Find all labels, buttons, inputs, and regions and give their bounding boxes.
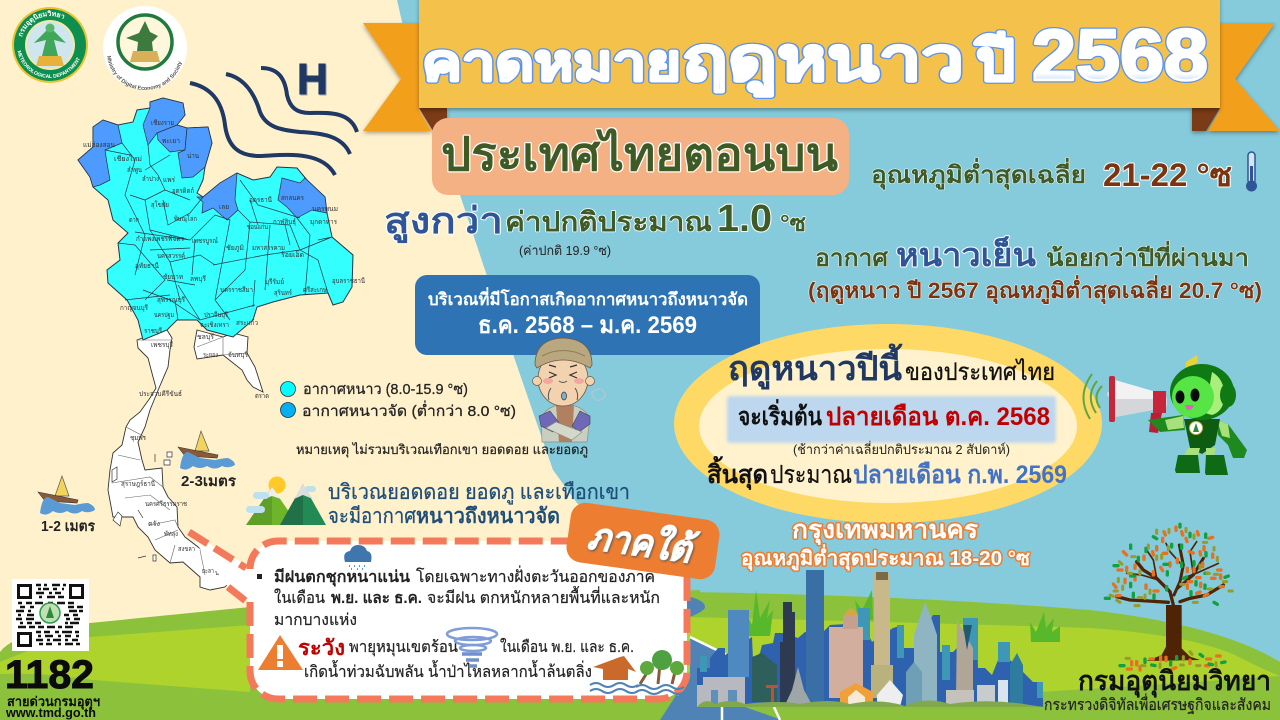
icon: boat and sea 2-3 m xyxy=(178,431,236,490)
text: higher than normal xyxy=(384,198,806,244)
icon: tornado xyxy=(447,628,497,666)
city skyline xyxy=(697,570,1044,707)
map of Thailand xyxy=(78,98,365,590)
buildings xyxy=(728,610,749,677)
map: province labels: แพร่ xyxy=(163,177,175,184)
map: province labels: นครพนม xyxy=(312,206,338,213)
map: south province borders xyxy=(112,337,247,575)
logo: Ministry of Digital Economy and Society: Ministry of Digital Economy and Society xyxy=(107,56,182,90)
map: province labels: มหาสารคาม xyxy=(252,245,285,252)
icon: sound waves xyxy=(1083,374,1102,419)
legend xyxy=(280,381,516,420)
text: mountain areas: จะมีอากาศ xyxy=(328,505,417,528)
map: province labels: สุรินทร์ xyxy=(274,289,292,297)
logo: Meteorological Department: METEOROLOGICAL DEPARTMENT xyxy=(18,50,80,78)
panel: southern region xyxy=(188,532,687,699)
tab: southern region heading: ภาคใต้ xyxy=(585,514,701,573)
map: province labels: อุทัยธานี xyxy=(135,262,159,270)
text: cooler than last year: หนาวเย็น xyxy=(896,235,1036,273)
map: province labels: กาฬสินธุ์ xyxy=(273,218,296,226)
southern text: มีฝนตกชุกหนาแน่น xyxy=(274,567,410,587)
map: province labels: ตรัง xyxy=(148,520,160,528)
map: province labels: ตราด xyxy=(255,393,269,400)
logo: Meteorological Department xyxy=(12,7,88,83)
end date: สิ้นสุด xyxy=(707,455,768,491)
text: mountain areas: หนาวถึงหนาวจัด xyxy=(416,505,560,528)
text: Bangkok xyxy=(741,516,1030,572)
map: province labels: ขอนแก่น xyxy=(247,224,268,231)
map: province labels: สงขลา xyxy=(178,546,195,553)
warning text: ระวัง xyxy=(298,637,345,660)
start date band: ปลายเดือน ต.ค. 2568 xyxy=(826,403,1050,431)
average minimum temperature xyxy=(871,157,1232,193)
icon: boat and sea 1-2 m: 1-2 เมตร xyxy=(41,519,95,535)
hotline xyxy=(5,653,100,720)
end date: ประมาณ xyxy=(770,461,852,489)
map: province labels: พัทลุง xyxy=(164,530,178,538)
map: province labels: สุพรรณบุรี xyxy=(157,296,185,304)
map: province labels: ลำพูน xyxy=(127,166,142,174)
average minimum temperature: 21-22 °ซ xyxy=(1103,157,1232,193)
map: province labels: นครปฐม xyxy=(154,312,174,319)
map: province labels: อุบลราชธานี xyxy=(332,277,365,285)
map: province labels: เพชรบูรณ์ xyxy=(192,237,218,245)
text: normal value: (ค่าปกติ 19.9 °ซ) xyxy=(519,243,611,258)
text: last year comparison: (ฤดูหนาว ปี 2567 อุณหภูมิต่ำสุดเฉลี่ย 20.7 °ซ) xyxy=(808,274,1262,305)
title: คาดหมาย xyxy=(422,35,681,91)
text: higher than normal: สูงกว่า xyxy=(384,200,503,244)
map note: หมายเหตุ ไม่รวมบริเวณเทือกเขา ยอดดอย และยอดภู xyxy=(296,442,588,458)
panel: cold period xyxy=(415,275,760,355)
map: province labels: เชียงราย xyxy=(151,119,174,127)
title: ฤดูหนาว xyxy=(682,26,964,97)
title: ปี xyxy=(974,29,1015,92)
map: province labels: สุราษฎร์ธานี xyxy=(121,480,155,488)
icon: shivering man xyxy=(532,338,605,442)
map: province labels: ปราจีนบุรี xyxy=(204,311,228,319)
hotline: 1182 xyxy=(5,653,94,697)
icon: green robot mascot xyxy=(1148,355,1247,475)
text: higher than normal: °ซ xyxy=(780,210,806,236)
text: Bangkok: อุณหภูมิต่ำสุดประมาณ 18-20 °ซ xyxy=(741,543,1030,572)
this winter heading: ฤดูหนาวปีนี้ xyxy=(728,343,903,390)
warning text: เกิดน้ำท่วมฉับพลัน น้ำป่าไหลหลากน้ำล้นตลิ่ง xyxy=(304,660,592,681)
banner xyxy=(419,0,1220,108)
legend: อากาศหนาว (8.0-15.9 °ซ) xyxy=(303,381,468,398)
southern text: ในเดือน xyxy=(274,588,325,607)
map: province labels: สระแก้ว xyxy=(236,319,258,327)
icon: boat and sea 1-2 m xyxy=(38,476,95,535)
map: province labels: ระยอง xyxy=(203,352,218,359)
map: province labels: ประจวบคีรีขันธ์ xyxy=(139,390,182,398)
map: province labels: ฉะเชิงเทรา xyxy=(200,321,229,329)
later than normal note: (ช้ากว่าค่าเฉลี่ยปกติประมาณ 2 สัปดาห์) xyxy=(793,441,1010,457)
icon: flooded trees xyxy=(636,650,684,694)
end date: ปลายเดือน ก.พ. 2569 xyxy=(853,461,1067,489)
map: province labels: ศรีสะเกษ xyxy=(303,286,327,294)
map: province labels: อุตรดิตถ์ xyxy=(172,187,194,195)
icon: warning triangle xyxy=(258,635,303,670)
warning text: ในเดือน พ.ย. และ ธ.ค. xyxy=(500,638,634,656)
southern text xyxy=(257,565,660,629)
map: province labels xyxy=(83,119,365,577)
map: southern peninsula xyxy=(108,330,238,590)
map: province labels: ราชบุรี xyxy=(144,327,162,335)
map: province labels: นครศรีธรรมราช xyxy=(145,500,187,508)
map: province labels: แม่ฮ่องสอน xyxy=(83,142,115,149)
warning text xyxy=(298,637,634,681)
legend: อากาศหนาวจัด (ต่ำกว่า 8.0 °ซ) xyxy=(302,400,516,420)
logo: Meteorological Department: กรมอุตุนิยมวิทยา xyxy=(18,10,64,37)
text: mountain areas xyxy=(328,481,630,528)
icon: autumn tree xyxy=(1105,524,1232,670)
text: cooler than last year xyxy=(815,235,1249,273)
hotline: สายด่วนกรมอุตุฯ xyxy=(7,694,100,710)
text: higher than normal: 1.0 xyxy=(717,198,772,240)
map: eastern provinces xyxy=(194,330,263,392)
skyline trees xyxy=(697,700,1044,707)
southern text: โดยเฉพาะทางฝั่งตะวันออกของภาค xyxy=(416,565,655,586)
panel: upper Thailand heading: ประเทศไทยตอนบน xyxy=(441,128,839,180)
southern text: พ.ย. และ ธ.ค. xyxy=(331,590,422,607)
map: very cold provinces xyxy=(78,98,327,220)
map: province labels: ร้อยเอ็ด xyxy=(281,250,304,259)
map: province labels: ชัยนาท xyxy=(163,273,183,281)
skyline backdrop xyxy=(697,615,1043,707)
background: left hill xyxy=(0,590,700,720)
average minimum temperature: อุณหภูมิต่ำสุดเฉลี่ย xyxy=(871,157,1086,191)
map: province labels: นครราชสีมา xyxy=(220,286,253,294)
map: province labels: อุดรธานี xyxy=(249,196,272,204)
text: Meteorological Department: กรมอุตุนิยมวิทยา xyxy=(1078,666,1271,698)
icon: grass tufts xyxy=(745,590,1060,642)
map: province labels: ลพบุรี xyxy=(190,275,206,283)
text: cooler than last year: น้อยกว่าปีที่ผ่านมา xyxy=(1046,240,1249,272)
this winter heading xyxy=(728,343,1055,390)
panel: this winter xyxy=(674,324,1102,523)
map: province labels: เลย xyxy=(219,204,229,211)
map: province labels: พิจิตร xyxy=(168,235,184,243)
map: province labels: พะเยา xyxy=(162,138,180,145)
text: higher than normal: ค่าปกติประมาณ xyxy=(505,207,712,237)
banner ribbons xyxy=(363,23,1280,131)
map: province labels: นราธิวาส xyxy=(215,569,240,577)
title: 2568 xyxy=(1032,16,1208,96)
hotline: www.tmd.go.th xyxy=(5,705,96,720)
panel: cold period: ธ.ค. 2568 – ม.ค. 2569 xyxy=(478,312,697,339)
start date band: จะเริ่มต้น xyxy=(738,399,822,431)
map: province labels: จันทบุรี xyxy=(228,351,248,359)
map: province labels: ปัตตานี xyxy=(206,550,224,558)
map: province labels: น่าน xyxy=(187,153,199,160)
map: province labels: ชลบุรี xyxy=(197,333,214,341)
title: 2568 xyxy=(1032,16,1208,96)
text: Bangkok: กรุงเทพมหานคร xyxy=(792,516,979,546)
map: islands xyxy=(112,452,172,561)
panel: upper Thailand heading xyxy=(432,118,849,195)
road xyxy=(660,596,782,720)
logo: Ministry of Digital Economy and Society xyxy=(103,6,187,90)
text: cooler than last year: อากาศ xyxy=(815,245,889,272)
end date xyxy=(707,455,1067,491)
this winter heading: ของประเทศไทย xyxy=(905,358,1055,386)
map: province labels: กำแพงเพชร xyxy=(136,235,168,243)
map: province labels: ลำปาง xyxy=(142,175,159,183)
icon: rain cloud xyxy=(344,545,372,569)
map: province labels: เพชรบุรี xyxy=(151,341,173,349)
icon: wind lines xyxy=(190,68,357,175)
map: province labels: กาญจนบุรี xyxy=(120,304,148,312)
background: right hill xyxy=(686,592,1280,720)
warning text: พายุหมุนเขตร้อน xyxy=(349,639,458,657)
icon: flooded house xyxy=(590,656,638,693)
title xyxy=(422,16,1208,97)
map: province labels: สกลนคร xyxy=(281,195,304,202)
southern text: จะมีฝน ตกหนักหลายพื้นที่และหนัก xyxy=(427,586,660,607)
title: ฤดูหนาว xyxy=(682,26,964,97)
icon: megaphone xyxy=(1107,376,1167,433)
tab: southern region heading xyxy=(565,501,721,581)
text: mountain areas: บริเวณยอดดอย ยอดภู และเทือกเขา xyxy=(328,481,630,505)
map: province labels: ชัยภูมิ xyxy=(226,244,244,252)
high pressure H: H xyxy=(297,55,328,104)
map: province labels: เชียงใหม่ xyxy=(114,154,142,163)
map: province labels: ยะลา xyxy=(202,568,214,575)
map: province borders xyxy=(105,143,332,320)
map: cold area outline xyxy=(78,98,353,340)
map: province labels: ตาก xyxy=(129,217,139,224)
map: province labels: พิษณุโลก xyxy=(174,214,197,223)
map: province labels: ชุมพร xyxy=(130,435,146,442)
southern text: มากบางแห่ง xyxy=(274,612,357,629)
panel: cold period: บริเวณที่มีโอกาสเกิดอากาศหนาวถึงหนาวจัด xyxy=(428,287,748,309)
text: Meteorological Department xyxy=(1044,666,1271,714)
icon: boat and sea 2-3 m: 2-3เมตร xyxy=(181,474,236,490)
title: คาดหมาย xyxy=(422,35,681,91)
map: province labels: สุโขทัย xyxy=(151,200,169,209)
map: province labels: มุกดาหาร xyxy=(310,219,337,226)
icon: thermometer xyxy=(1246,152,1257,192)
map: province labels: บุรีรัมย์ xyxy=(265,278,284,286)
start date band xyxy=(727,396,1056,443)
icon: mountains xyxy=(246,476,326,525)
title: ปี xyxy=(974,29,1015,92)
map: province labels: นครสวรรค์ xyxy=(157,252,185,260)
QR code xyxy=(12,579,89,651)
